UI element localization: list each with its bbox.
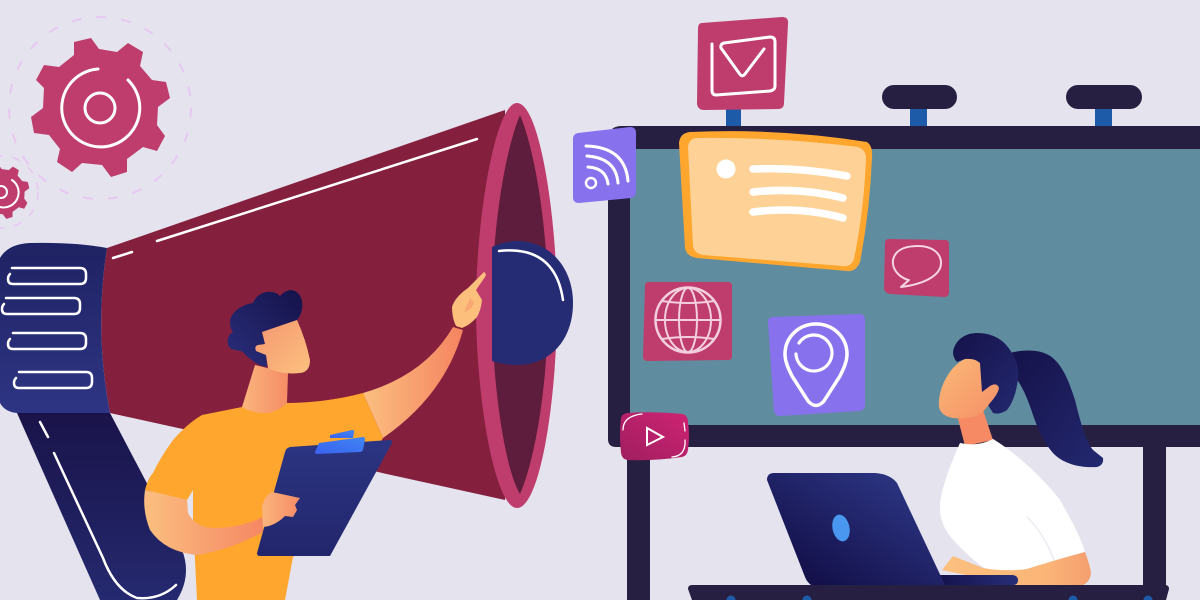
megaphone mouth rim [476, 103, 557, 508]
billboard top pegs [726, 85, 1142, 130]
man hair [228, 290, 302, 367]
billboard [608, 85, 1200, 600]
icon: large gear [9, 17, 191, 199]
icon: location pin [768, 314, 865, 416]
woman shirt [940, 439, 1085, 570]
man left arm [144, 490, 263, 555]
laptop logo [830, 513, 852, 543]
laptop lid [767, 473, 945, 585]
icon: rss [573, 127, 636, 203]
icon: video play [620, 412, 689, 460]
woman face [939, 359, 999, 418]
woman neck [957, 410, 993, 446]
megaphone mouth inside [492, 115, 548, 494]
man hand on clipboard [262, 492, 300, 527]
billboard legs [627, 440, 1166, 600]
man neck [242, 365, 288, 413]
woman ponytail [1010, 351, 1103, 467]
megaphone handle [17, 413, 186, 600]
message card [679, 131, 872, 271]
woman arm [942, 552, 1091, 585]
megaphone grip [0, 243, 110, 413]
shirt crease [1027, 517, 1054, 560]
icon: check mail [697, 17, 788, 110]
laptop base [935, 575, 1018, 585]
laptop [767, 473, 1018, 585]
cone highlight [113, 139, 477, 258]
man shirt [145, 393, 383, 600]
man face [255, 320, 310, 373]
icon: speech bubble [884, 239, 949, 297]
megaphone speaker dome [492, 241, 573, 365]
man pointing arm [363, 327, 463, 438]
desk [688, 585, 1169, 600]
woman hair [953, 333, 1018, 414]
billboard screen [630, 149, 1200, 425]
icon: small gear [0, 156, 38, 228]
billboard frame [608, 126, 1200, 447]
icon: globe [643, 282, 732, 361]
man [144, 272, 486, 600]
woman [939, 333, 1103, 585]
megaphone cone [101, 110, 505, 500]
clipboard [257, 430, 392, 556]
megaphone [0, 103, 573, 600]
man hand [452, 272, 486, 328]
